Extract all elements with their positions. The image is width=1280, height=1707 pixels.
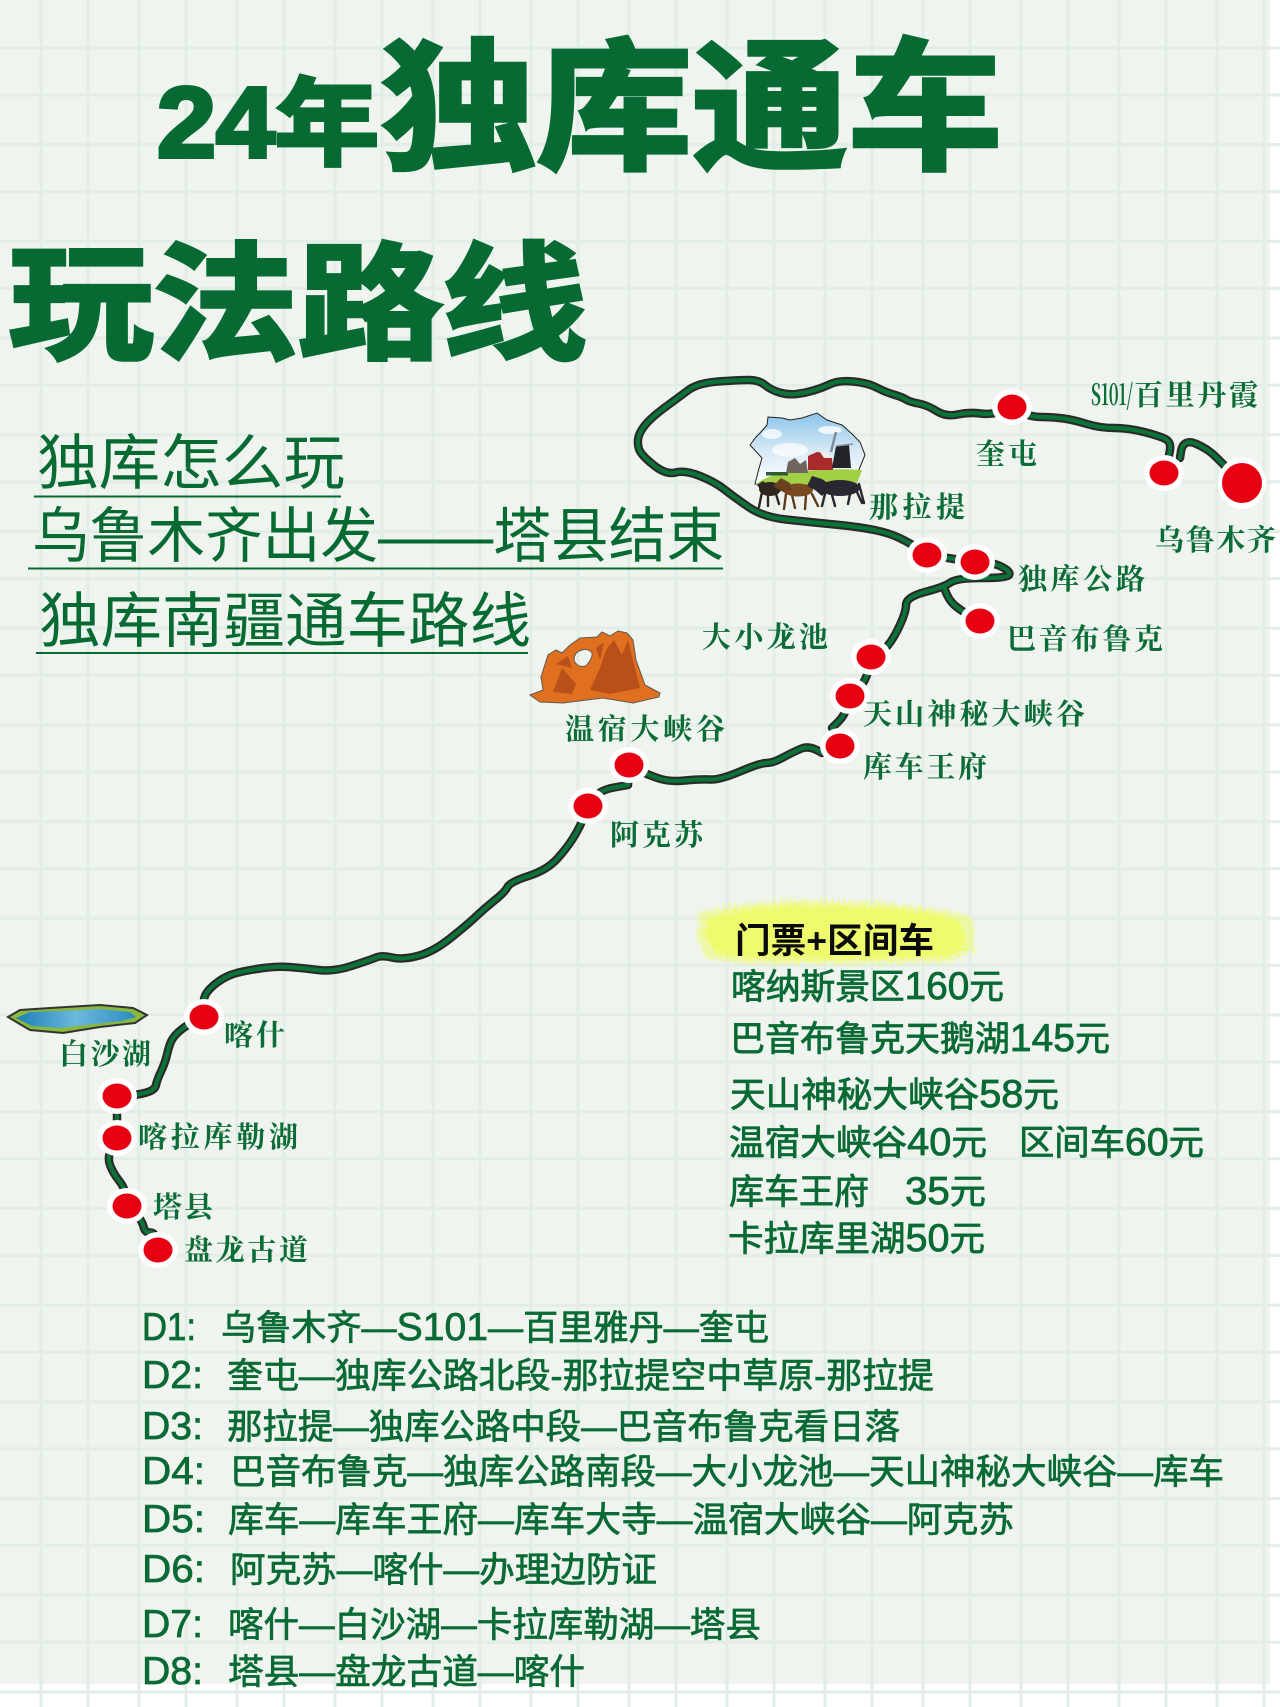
station: 大小龙池: 大小龙池 xyxy=(702,615,828,656)
heading: tickets and shuttle: 门票+区间车 xyxy=(735,922,934,961)
station: 天山神秘大峡谷 xyxy=(830,678,1085,733)
route map xyxy=(8,373,1276,1269)
icon: Wensu canyon rock xyxy=(530,631,660,703)
station: 那拉提: 那拉提 xyxy=(869,485,965,526)
station: 白沙湖 xyxy=(59,1032,151,1114)
day 2: 奎屯—独库公路北段-那拉提空中草原-那拉提 xyxy=(227,1357,934,1396)
price lines: 喀纳斯景区160元 xyxy=(731,965,1004,1008)
price lines: 温宿大峡谷40元 xyxy=(729,1121,987,1164)
subheading block: 独库怎么玩 xyxy=(37,430,345,497)
day 1: 乌鲁木齐—S101—百里雅丹—奎屯 xyxy=(221,1306,769,1349)
icon: grassland with windmill and horses xyxy=(750,413,865,509)
station: 阿克苏: 阿克苏 xyxy=(610,813,705,854)
title: 独库通车 xyxy=(381,30,1003,189)
day 6: 阿克苏—喀什—办理边防证 xyxy=(230,1551,657,1590)
subheading block: 独库南疆通车路线 xyxy=(39,588,531,655)
price lines: 35元 xyxy=(905,1170,986,1213)
day 7: D7: xyxy=(142,1603,203,1646)
station: 独库公路: 独库公路 xyxy=(1018,557,1145,598)
icon: Baisha lake xyxy=(8,1005,147,1033)
day 5: 库车—库车王府—库车大寺—温宿大峡谷—阿克苏 xyxy=(228,1501,1014,1540)
station: 独库公路 xyxy=(955,544,1145,598)
day 8: D8: xyxy=(142,1650,203,1693)
station: 盘龙古道: 盘龙古道 xyxy=(184,1228,308,1269)
station: 塔县 xyxy=(107,1185,214,1226)
price lines: 卡拉库里湖50元 xyxy=(728,1217,985,1260)
price lines xyxy=(728,965,1204,1260)
title xyxy=(9,30,1003,376)
subheading block xyxy=(28,430,724,655)
station: 库车王府: 库车王府 xyxy=(863,745,987,786)
station: 乌鲁木齐 xyxy=(1155,457,1276,559)
station: 温宿大峡谷: 温宿大峡谷 xyxy=(565,707,725,748)
subheading block: 乌鲁木齐出发——塔县结束 xyxy=(32,503,724,570)
station: 白沙湖: 白沙湖 xyxy=(59,1032,151,1073)
station: 巴音布鲁克 xyxy=(960,603,1163,658)
station: 那拉提 xyxy=(869,485,965,573)
station: 喀拉库勒湖: 喀拉库勒湖 xyxy=(138,1115,298,1156)
day 8: 塔县—盘龙古道—喀什 xyxy=(228,1653,585,1692)
station: S101 百里丹霞: S101/ xyxy=(1091,373,1133,414)
station: 大小龙池 xyxy=(702,615,891,675)
station: 库车王府 xyxy=(820,728,987,786)
station: 温宿大峡谷 xyxy=(565,707,725,783)
panel: daily itinerary xyxy=(142,1306,1224,1693)
station: 乌鲁木齐: 乌鲁木齐 xyxy=(1155,518,1276,559)
station: 喀什 xyxy=(184,999,285,1054)
panel: ticket prices xyxy=(696,900,1204,1260)
price lines: 库车王府 xyxy=(729,1173,869,1212)
price lines: 天山神秘大峡谷58元 xyxy=(730,1073,1059,1116)
station: 喀什: 喀什 xyxy=(224,1013,285,1054)
station: 塔县: 塔县 xyxy=(153,1185,214,1226)
highlight: yellow brush xyxy=(696,900,976,964)
day 4: D4: xyxy=(142,1450,205,1493)
day 1: D1: xyxy=(142,1306,196,1349)
price lines: 区间车60元 xyxy=(1019,1121,1204,1164)
station: 奎屯: 奎屯 xyxy=(976,432,1037,473)
day 7: 喀什—白沙湖—卡拉库勒湖—塔县 xyxy=(228,1606,761,1645)
station: S101 百里丹霞 xyxy=(1091,373,1258,491)
station: 阿克苏 xyxy=(568,788,705,854)
day 5: D5: xyxy=(142,1498,205,1541)
day 4: 巴音布鲁克—独库公路南段—大小龙池—天山神秘大峡谷—库车 xyxy=(230,1453,1224,1492)
price lines: 巴音布鲁克天鹅湖145元 xyxy=(730,1017,1110,1060)
day 2: D2: xyxy=(142,1354,203,1397)
station: S101 百里丹霞: 百里丹霞 xyxy=(1134,373,1258,414)
day 3: D3: xyxy=(142,1405,203,1448)
title: 24 xyxy=(157,67,275,179)
station: 天山神秘大峡谷: 天山神秘大峡谷 xyxy=(863,692,1085,733)
day 3: 那拉提—独库公路中段—巴音布鲁克看日落 xyxy=(227,1408,900,1447)
station: 巴音布鲁克: 巴音布鲁克 xyxy=(1007,617,1163,658)
title: 年 xyxy=(275,72,379,178)
title: 玩法路线 xyxy=(9,234,587,376)
road line xyxy=(109,380,1242,1250)
station: 奎屯 xyxy=(976,389,1037,473)
day 6: D6: xyxy=(142,1548,205,1591)
